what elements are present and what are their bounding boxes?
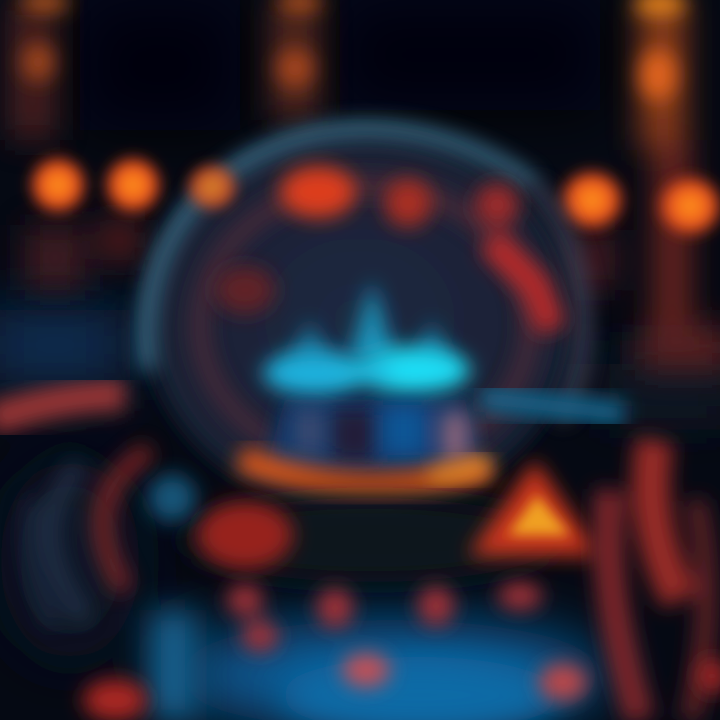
core: orange arc under structure	[240, 458, 490, 487]
core: cyan glowing structure	[263, 280, 480, 470]
ripple rings: lower left	[30, 450, 150, 625]
sphere: red segments on upper band	[215, 166, 552, 330]
sphere outer right rim	[535, 185, 584, 420]
streak: red left band	[0, 395, 125, 420]
lights: orange row of glowing orbs	[24, 151, 720, 242]
base: dark disc	[180, 498, 560, 582]
sphere rim	[146, 128, 535, 370]
base: blue spot	[148, 474, 196, 522]
sphere inner ring	[200, 185, 530, 465]
sphere body	[145, 130, 575, 510]
lights: orange top glows	[21, 0, 686, 101]
columns: dim red vertical posts	[10, 0, 720, 370]
core cyan spires	[286, 280, 454, 365]
dots: red spots	[83, 582, 720, 720]
streak: blue right of core	[480, 398, 625, 414]
base: red mound	[197, 501, 293, 569]
core dark windows	[295, 405, 468, 462]
base: amber pyramid	[468, 460, 600, 556]
right swirl: red vertical band	[608, 440, 706, 720]
lower blue pool	[150, 610, 560, 720]
core dark blue base	[265, 400, 480, 470]
arc highlight	[430, 462, 488, 478]
orb: orange glow on sphere edge	[182, 159, 242, 215]
sphere: glass globe	[145, 128, 584, 510]
core cyan bar	[263, 347, 470, 395]
